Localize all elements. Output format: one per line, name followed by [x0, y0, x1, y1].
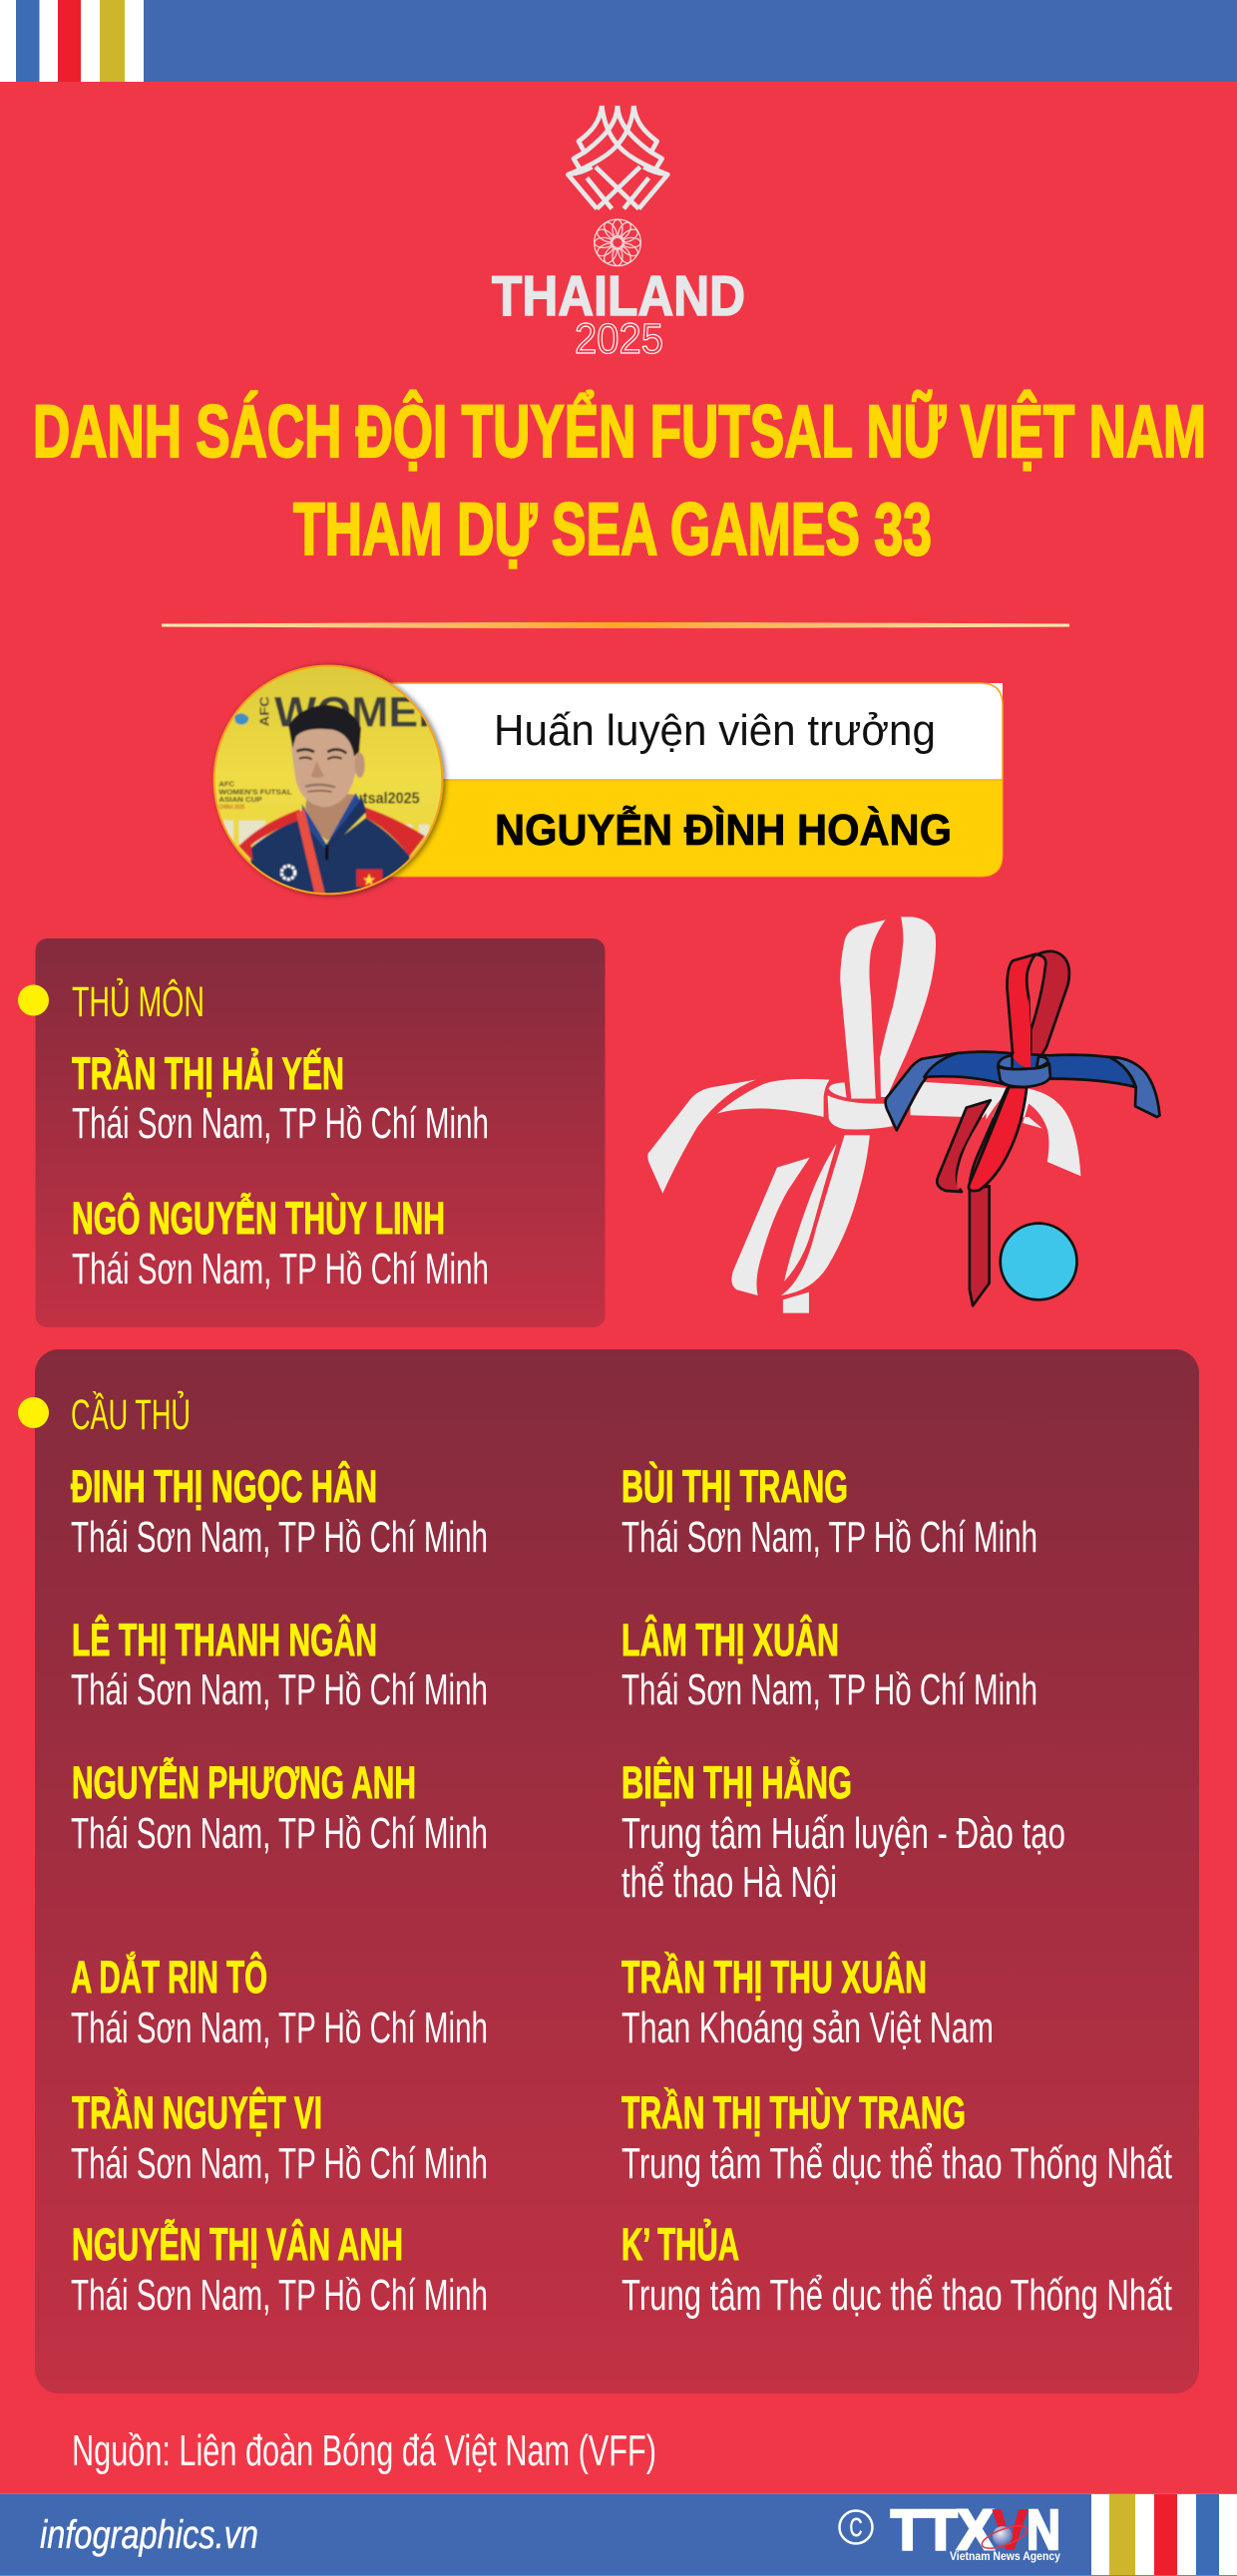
coach portrait — [209, 661, 451, 901]
player: Đinh Thị Ngọc Hân — [71, 1461, 488, 1562]
player: Trần Nguyệt Vi: Thái Sơn Nam, TP Hồ Chí Minh — [71, 2140, 488, 2188]
logo wordmark: THAILAND — [492, 264, 745, 328]
coach card — [209, 661, 1003, 901]
player: K' Thủa: K’ THỦA — [621, 2219, 739, 2270]
player: Ngô Nguyễn Thùy Linh: Thái Sơn Nam, TP Hồ Chí Minh — [72, 1246, 489, 1293]
top banner — [0, 0, 1237, 82]
coach portrait: AFC — [218, 780, 235, 789]
coach name: NGUYỄN ĐÌNH HOÀNG — [495, 805, 952, 855]
coach portrait: WOMEN'S FUTSAL — [218, 788, 292, 797]
logo: TTXVN — [891, 2498, 1060, 2563]
player: Nguyễn Phương Anh: Thái Sơn Nam, TP Hồ Chí Minh — [71, 1810, 488, 1858]
player: A Dắt Rin Tô: Thái Sơn Nam, TP Hồ Chí Minh — [71, 2005, 488, 2052]
coach portrait: CHINA 2025 — [218, 805, 245, 811]
player: Ngô Nguyễn Thùy Linh — [72, 1193, 489, 1293]
logo: TTXVN: N — [1027, 2498, 1060, 2562]
player: Đinh Thị Ngọc Hân: Thái Sơn Nam, TP Hồ Chí Minh — [71, 1514, 488, 1562]
player: Bùi Thị Trang: BÙI THỊ TRANG — [621, 1461, 848, 1512]
footer stripes — [1091, 2494, 1237, 2575]
bullet — [18, 1397, 49, 1428]
heading: players: CẦU THỦ — [71, 1390, 191, 1439]
player: Trần Thị Hải Yến: Thái Sơn Nam, TP Hồ Chí Minh — [72, 1100, 489, 1148]
logo: TTXVN: TTX — [891, 2498, 994, 2562]
player: Trần Thị Thùy Trang: TRẦN THỊ THÙY TRANG — [621, 2087, 966, 2138]
heading: goalkeepers: THỦ MÔN — [72, 977, 205, 1026]
bullet — [18, 985, 49, 1015]
logo: TTXVN: V — [993, 2498, 1028, 2562]
icon: lotus flower — [595, 219, 640, 266]
player: Nguyễn Phương Anh: NGUYỄN PHƯƠNG ANH — [72, 1757, 416, 1808]
player: Trần Nguyệt Vi: TRẦN NGUYỆT VI — [72, 2087, 322, 2138]
icon: temple roof emblem — [568, 106, 667, 208]
player: Biện Thị Hằng: Trung tâm Huấn luyện - Đào tạo — [621, 1810, 1065, 1858]
title — [33, 390, 1206, 570]
player: A Dắt Rin Tô: A DẮT RIN TÔ — [71, 1952, 267, 2003]
ball — [1001, 1224, 1076, 1299]
player: A Dắt Rin Tô — [71, 1952, 488, 2052]
panel: players — [18, 1349, 1199, 2393]
player: Biện Thị Hằng: thể thao Hà Nội — [621, 1859, 837, 1907]
copyright mark: C — [850, 2512, 862, 2542]
player: Nguyễn Thị Vân Anh — [71, 2219, 488, 2320]
player: Trần Thị Thùy Trang — [621, 2087, 1172, 2188]
logo: Thailand 2025 — [492, 106, 745, 363]
player: Lâm Thị Xuân — [621, 1615, 1037, 1714]
player: Lâm Thị Xuân: LÂM THỊ XUÂN — [621, 1615, 839, 1665]
player: Trần Thị Thu Xuân: TRẦN THỊ THU XUÂN — [621, 1952, 927, 2003]
illustration: white and coloured ribbons with ball — [647, 917, 1159, 1313]
player: Trần Thị Hải Yến: TRẦN THỊ HẢI YẾN — [72, 1048, 344, 1099]
player: Biện Thị Hằng: BIỆN THỊ HẰNG — [621, 1757, 852, 1808]
coach portrait: utsal2025 — [354, 791, 420, 808]
coach label panel — [328, 683, 1003, 877]
logo year: 2025 — [575, 315, 663, 363]
footer banner — [0, 2493, 1237, 2576]
panel: goalkeepers — [18, 938, 605, 1327]
player: Trần Thị Thu Xuân: Than Khoáng sản Việt Nam — [621, 2005, 994, 2052]
player: Lê Thị Thanh Ngân: Thái Sơn Nam, TP Hồ Chí Minh — [71, 1666, 488, 1714]
coach role: Huấn luyện viên trưởng — [494, 707, 936, 755]
coloured ribbon — [886, 951, 1159, 1305]
divider — [162, 622, 1069, 628]
coach portrait: ASIAN CUP — [218, 795, 262, 804]
title: THAM DỰ SEA GAMES 33 — [293, 488, 932, 570]
player: K' Thủa — [621, 2219, 1172, 2320]
players panel background — [35, 1349, 1199, 2393]
player: Bùi Thị Trang — [621, 1461, 1037, 1562]
player: Lê Thị Thanh Ngân — [71, 1615, 488, 1714]
player: Nguyễn Phương Anh — [71, 1757, 488, 1858]
player: Lê Thị Thanh Ngân: LÊ THỊ THANH NGÂN — [72, 1615, 377, 1665]
player: Đinh Thị Ngọc Hân: ĐINH THỊ NGỌC HÂN — [71, 1461, 377, 1512]
source note: Nguồn: Liên đoàn Bóng đá Việt Nam (VFF) — [72, 2427, 656, 2475]
copyright mark — [840, 2511, 872, 2543]
player: Trần Thị Hải Yến — [72, 1048, 489, 1148]
player: Trần Thị Thu Xuân — [621, 1952, 994, 2052]
player: Ngô Nguyễn Thùy Linh: NGÔ NGUYỄN THÙY LINH — [72, 1193, 445, 1244]
white ribbon — [647, 917, 1080, 1313]
player: Nguyễn Thị Vân Anh: NGUYỄN THỊ VÂN ANH — [72, 2219, 403, 2270]
player: Nguyễn Thị Vân Anh: Thái Sơn Nam, TP Hồ Chí Minh — [71, 2272, 488, 2320]
player: Biện Thị Hằng — [621, 1757, 1065, 1907]
coach portrait: WOMEN — [274, 688, 451, 736]
player: Lâm Thị Xuân: Thái Sơn Nam, TP Hồ Chí Minh — [621, 1666, 1037, 1714]
logo: TTXVN: Vietnam News Agency — [950, 2549, 1060, 2563]
player: Trần Nguyệt Vi — [71, 2087, 488, 2188]
coach portrait: AFC — [257, 696, 271, 726]
footer site name: infographics.vn — [40, 2513, 258, 2557]
goalkeepers panel background — [36, 938, 605, 1327]
player: Bùi Thị Trang: Thái Sơn Nam, TP Hồ Chí Minh — [621, 1514, 1037, 1562]
